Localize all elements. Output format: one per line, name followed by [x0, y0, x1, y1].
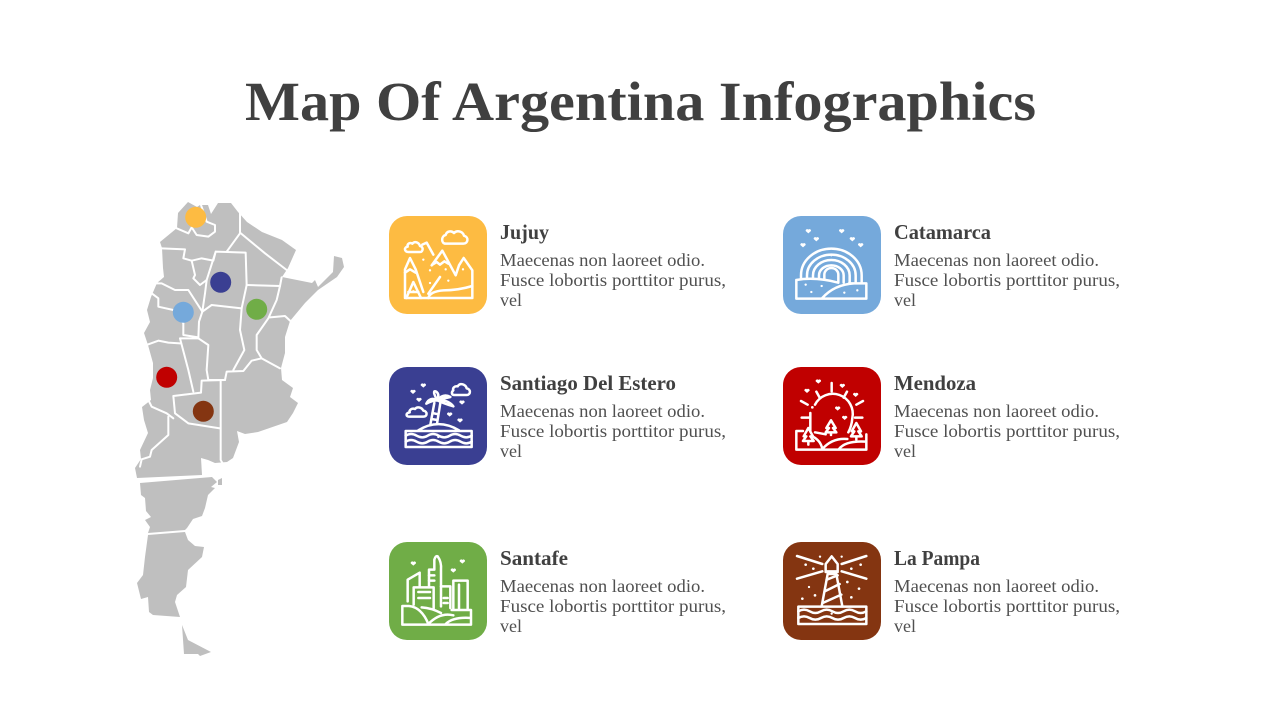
heading: Mendoza — [894, 371, 976, 395]
heading: Santafe — [500, 546, 568, 570]
icon: mountains — [389, 216, 487, 314]
map: Tierra del Fuego — [182, 625, 211, 656]
description: vel — [500, 441, 522, 461]
pin: Santiago Del Estero — [210, 272, 231, 293]
description: Maecenas non laoreet odio. — [894, 250, 1099, 270]
pin: Catamarca — [173, 302, 194, 323]
map: province borders — [140, 205, 290, 470]
item: Mendoza — [783, 367, 1120, 465]
description — [500, 250, 726, 310]
item: Catamarca — [783, 216, 1120, 314]
pin: Mendoza — [156, 367, 177, 388]
icon: palm island — [389, 367, 487, 465]
map: Santa Cruz — [137, 532, 204, 617]
description: Maecenas non laoreet odio. — [500, 401, 705, 421]
description: vel — [500, 290, 522, 310]
description: vel — [500, 616, 522, 636]
description: vel — [894, 441, 916, 461]
description — [894, 401, 1120, 461]
description — [500, 401, 726, 461]
heading: Santiago Del Estero — [500, 371, 676, 395]
pin: Jujuy — [185, 207, 206, 228]
icon: sun and trees — [783, 367, 881, 465]
description: vel — [894, 290, 916, 310]
icon: city — [389, 542, 487, 640]
heading: Jujuy — [500, 220, 549, 244]
map: northern and central provinces — [135, 202, 344, 478]
description — [894, 576, 1120, 636]
description: Maecenas non laoreet odio. — [500, 250, 705, 270]
description: Maecenas non laoreet odio. — [894, 576, 1099, 596]
item: Jujuy — [389, 216, 726, 314]
description: vel — [894, 616, 916, 636]
description: Maecenas non laoreet odio. — [894, 401, 1099, 421]
description: Fusce lobortis porttitor purus, — [500, 270, 726, 290]
pin: Santafe — [246, 299, 267, 320]
title: Map Of Argentina Infographics — [245, 71, 1036, 132]
item: Santafe — [389, 542, 726, 640]
icon: rainbow — [783, 216, 881, 314]
heading: La Pampa — [894, 546, 980, 570]
map: Chubut — [140, 477, 217, 533]
item: Santiago Del Estero — [389, 367, 726, 465]
description: Fusce lobortis porttitor purus, — [894, 421, 1120, 441]
description: Maecenas non laoreet odio. — [500, 576, 705, 596]
heading: Catamarca — [894, 220, 991, 244]
map of Argentina — [135, 202, 344, 656]
description: Fusce lobortis porttitor purus, — [500, 421, 726, 441]
map: Valdes peninsula — [218, 478, 222, 485]
description: Fusce lobortis porttitor purus, — [500, 596, 726, 616]
pin: La Pampa — [193, 401, 214, 422]
description: Fusce lobortis porttitor purus, — [894, 596, 1120, 616]
description: Fusce lobortis porttitor purus, — [894, 270, 1120, 290]
icon: lighthouse — [783, 542, 881, 640]
item: La Pampa — [783, 542, 1120, 640]
description — [500, 576, 726, 636]
description — [894, 250, 1120, 310]
